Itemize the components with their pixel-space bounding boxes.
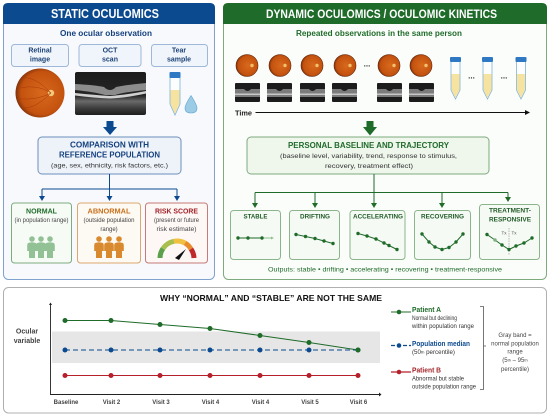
card: stable xyxy=(230,210,280,260)
x axis labels: Baseline xyxy=(54,400,79,406)
gray band note: percentile) xyxy=(501,367,529,373)
icon: tear drop xyxy=(185,96,197,113)
subtitle: repeated observations: Repeated observations in the same person xyxy=(296,29,462,38)
card: risk score xyxy=(146,203,208,263)
label: tear sample xyxy=(152,44,208,66)
x axis labels xyxy=(54,400,368,406)
box: personal baseline and trajectory xyxy=(247,137,489,174)
chart title: WHY “NORMAL” AND “STABLE” ARE NOT THE SAME xyxy=(160,293,382,303)
card: abnormal: range) xyxy=(100,227,118,233)
gray band note: – 95 xyxy=(511,358,525,364)
chart: treatment-responsive: Tx xyxy=(502,230,507,236)
card: treatment-responsive: RESPONSIVE xyxy=(489,216,532,224)
panel: static oculomics xyxy=(3,3,215,280)
tear sample series: ... xyxy=(501,72,507,80)
chart: recovering xyxy=(420,232,465,251)
x axis labels: Visit 4 xyxy=(202,400,220,406)
time arrow xyxy=(235,108,530,118)
icon: abnormal people xyxy=(94,236,124,258)
gray band note: range xyxy=(507,350,523,356)
tear sample series xyxy=(450,57,526,99)
legend: population median: Population median xyxy=(412,339,470,348)
label: retinal image xyxy=(12,44,68,66)
gray band note: Gray band = xyxy=(498,333,532,339)
card: drifting: DRIFTING xyxy=(300,214,330,220)
legend: patient B: Patient B xyxy=(412,366,442,374)
gray band note xyxy=(491,333,539,373)
box: comparison with reference population: COMPARISON WITH xyxy=(70,140,149,150)
box: comparison with reference population: (age, sex, ethnicity, risk factors, etc.) xyxy=(51,162,168,170)
axis label: Ocular xyxy=(16,328,38,336)
box: personal baseline and trajectory: PERSONAL BASELINE AND TRAJECTORY xyxy=(288,141,450,150)
box: comparison with reference population xyxy=(38,137,181,174)
series: population median xyxy=(62,348,358,352)
axis label: variable xyxy=(14,338,40,345)
card: recovering xyxy=(414,210,470,260)
card: normal: (in population range) xyxy=(14,218,68,224)
card: stable: STABLE xyxy=(244,214,268,220)
card: risk score: RISK SCORE xyxy=(155,206,198,216)
legend: patient B: outside population range xyxy=(412,384,477,390)
card: normal: NORMAL xyxy=(26,206,57,216)
marker: patient A endpoint xyxy=(356,348,360,352)
card: risk score: (present or future xyxy=(154,218,200,224)
gray band note: normal population xyxy=(491,342,539,348)
legend: population median xyxy=(391,339,470,356)
gray band note: th xyxy=(508,357,511,362)
arrows: comparison to outcomes xyxy=(39,174,180,201)
card: abnormal: (outside population xyxy=(84,218,134,224)
chart: treatment-responsive: Tx xyxy=(512,230,517,236)
retinal image series xyxy=(236,54,432,76)
time arrow: Time xyxy=(235,108,252,118)
label: retinal image: image xyxy=(30,56,50,64)
x axis labels: Visit 4 xyxy=(252,400,270,406)
chart: stable xyxy=(236,236,274,240)
card: abnormal: ABNORMAL xyxy=(88,206,131,216)
gray band note: (5 xyxy=(502,358,508,364)
label: OCT scan: OCT xyxy=(103,48,118,54)
icon: tear sample tube xyxy=(170,72,180,115)
legend: patient B xyxy=(391,366,477,390)
x axis labels: Visit 2 xyxy=(103,400,121,406)
subtitle: one ocular observation: One ocular observation xyxy=(60,29,152,38)
label: OCT scan xyxy=(79,44,141,66)
card: accelerating xyxy=(350,210,405,260)
heading: dynamic oculomics: DYNAMIC OCULOMICS / OCULOMIC KINETICS xyxy=(266,7,497,21)
legend: patient A: Normal but declining xyxy=(412,316,457,322)
outputs line: Outputs: stable • drifting • accelerating • recovering • treatment-responsive xyxy=(268,266,502,274)
label: tear sample: Tear xyxy=(172,48,186,54)
legend: patient A xyxy=(391,305,475,330)
icon: risk gauge xyxy=(160,241,194,260)
chart: accelerating xyxy=(356,232,399,251)
axis label xyxy=(14,328,40,345)
chart: treatment-responsive xyxy=(485,228,534,255)
legend: patient B: Abnormal but stable xyxy=(412,376,465,382)
bracket xyxy=(480,306,486,390)
icon: retinal fundus xyxy=(16,68,64,118)
card: risk score: risk estimate) xyxy=(156,227,197,233)
chart: drifting xyxy=(294,233,335,245)
heading: static oculomics: STATIC OCULOMICS xyxy=(51,7,159,21)
panel: normal vs stable xyxy=(4,288,546,413)
arrow: down to comparison xyxy=(103,121,117,135)
icon: normal people xyxy=(27,236,55,258)
card: treatment-responsive xyxy=(480,204,540,260)
x axis labels: Visit 3 xyxy=(152,400,170,406)
box: personal baseline and trajectory: (baseline level, variability, trend, response to stimulus, xyxy=(280,153,457,160)
arrow: down to baseline xyxy=(363,121,377,136)
label: retinal image: Retinal xyxy=(28,48,52,54)
label: tear sample: sample xyxy=(167,56,191,64)
x axis labels: Visit 5 xyxy=(301,400,319,406)
line chart xyxy=(49,302,382,406)
legend: population median: (50 xyxy=(412,350,421,356)
panel: dynamic oculomics xyxy=(223,3,547,280)
heading: dynamic oculomics xyxy=(223,3,547,24)
legend: patient A: within population range xyxy=(411,324,475,330)
OCT image series xyxy=(235,83,434,102)
label: OCT scan: scan xyxy=(102,56,118,64)
heading: static oculomics xyxy=(3,3,215,24)
card: normal xyxy=(12,203,72,263)
x axis labels: Visit 6 xyxy=(350,400,368,406)
card: recovering: RECOVERING xyxy=(421,214,464,220)
icon: OCT scan image xyxy=(75,72,146,115)
box: comparison with reference population: REFERENCE POPULATION xyxy=(59,150,160,160)
card: drifting xyxy=(290,210,340,260)
box: personal baseline and trajectory: recovery, treatment effect) xyxy=(325,163,413,170)
card: accelerating: ACCELERATING xyxy=(353,214,403,220)
retinal image series: ... xyxy=(364,60,370,68)
series: patient B xyxy=(62,373,360,378)
gray band note: th xyxy=(524,357,528,362)
card: abnormal xyxy=(78,203,140,263)
legend: population median: th xyxy=(421,349,424,354)
arrows: baseline to trajectories xyxy=(252,174,511,208)
legend: population median: percentile) xyxy=(424,350,455,356)
tear sample series: ... xyxy=(468,72,475,80)
series: patient A xyxy=(62,318,360,352)
legend: patient A: Patient A xyxy=(412,305,442,314)
card: treatment-responsive: TREATMENT- xyxy=(489,208,531,214)
